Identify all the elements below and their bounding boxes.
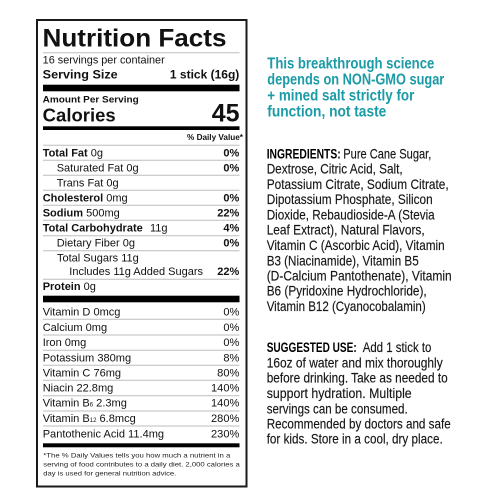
text block: ingredients: Dipotassium Phosphate, Silicon <box>267 191 433 207</box>
vitamin and mineral rows: 0% <box>223 307 239 319</box>
nutrient rows: 4% <box>223 223 240 235</box>
callout: teal heading <box>267 55 444 121</box>
nutrient rows: Sodium 500mg <box>43 208 120 220</box>
footnote: day is used for general nutrition advice. <box>43 470 176 477</box>
text block: suggested use: Recommended by doctors and safe <box>267 415 451 431</box>
daily value header: % Daily Value* <box>187 133 244 142</box>
nutrient rows: 22% <box>217 266 240 278</box>
footnote <box>43 452 240 477</box>
nutrient rows: Total Sugars 11g <box>57 253 139 265</box>
text block: ingredients: Vitamin B12 (Cyanocobalamin) <box>267 298 426 314</box>
vitamin and mineral rows: Vitamin C 76mg <box>43 368 121 380</box>
text block: ingredients: B6 (Pyridoxine Hydrochloride), <box>267 283 427 299</box>
text block: ingredients: Leaf Extract), Natural Flavors, <box>267 222 425 238</box>
vitamin and mineral rows: Niacin 22.8mg <box>43 383 113 395</box>
vitamin and mineral rows: Vitamin B6 2.3mg <box>43 398 127 410</box>
nutrient rows: 22% <box>217 208 240 220</box>
vitamin and mineral rows <box>43 307 240 440</box>
footnote: serving of food contributes to a daily diet. 2,000 calories a <box>43 462 240 469</box>
text block: suggested use: support hydration. Multiple <box>267 385 412 401</box>
callout: teal heading: + mined salt strictly for <box>267 87 414 104</box>
text block: suggested use: servings can be consumed. <box>267 400 408 416</box>
callout: teal heading: depends on NON-GMO sugar <box>267 71 444 88</box>
text block: ingredients: Potassium Citrate, Sodium Citrate, <box>267 176 449 192</box>
panel border <box>37 20 246 486</box>
footnote: *The % Daily Values tells you how much a nutrient in a <box>43 452 231 459</box>
nutrient rows: 11g <box>150 223 168 235</box>
text block: suggested use: 16oz of water and mix thoroughly <box>267 354 443 370</box>
text block: suggested use: SUGGESTED USE: <box>267 339 357 355</box>
text block: ingredients <box>267 145 452 314</box>
nutrient rows: Saturated Fat 0g <box>57 163 139 175</box>
servings per container: 16 servings per container <box>43 54 165 66</box>
text block: ingredients: Dioxide, Rebaudioside-A (Stevia <box>267 206 435 222</box>
nutrient rows: 0% <box>223 193 240 205</box>
text block: ingredients: B3 (Niacinamide), Vitamin B5 <box>267 252 419 268</box>
vitamin and mineral rows: 80% <box>217 368 239 380</box>
vitamin and mineral rows: 8% <box>223 352 239 364</box>
nutrient rows: 0% <box>223 148 240 160</box>
text block: suggested use: for kids. Store in a cool, dry place. <box>267 431 443 447</box>
nutrient rows: Cholesterol 0mg <box>43 193 128 205</box>
vitamin and mineral rows: Vitamin D 0mcg <box>43 307 120 319</box>
calories row: 45 <box>212 100 240 128</box>
text block: ingredients: Vitamin C (Ascorbic Acid), Vitamin <box>267 237 445 253</box>
nutrient rows: Total Fat 0g <box>43 148 103 160</box>
calories row <box>43 100 240 128</box>
nutrient rows: Protein 0g <box>43 281 96 293</box>
nutrient rows: Trans Fat 0g <box>57 178 119 190</box>
vitamin and mineral rows: Pantothenic Acid 11.4mg <box>43 428 164 440</box>
vitamin and mineral rows: 140% <box>211 398 239 410</box>
serving size row: Serving Size <box>43 67 118 81</box>
heading: Nutrition Facts: Nutrition Facts <box>42 25 226 53</box>
nutrient rows <box>43 148 240 293</box>
vitamin and mineral rows: Potassium 380mg <box>43 352 131 364</box>
vitamin and mineral rows: 230% <box>211 428 239 440</box>
amount per serving: Amount Per Serving <box>43 95 139 105</box>
text block: ingredients: INGREDIENTS: <box>267 145 341 161</box>
nutrient rows: 0% <box>223 238 240 250</box>
vitamin and mineral rows: Calcium 0mg <box>43 322 107 334</box>
vitamin and mineral rows: 140% <box>211 383 239 395</box>
vitamin and mineral rows: Vitamin B12 6.8mcg <box>43 413 136 425</box>
panel: nutrition facts label <box>37 20 246 486</box>
thick divider bar <box>43 85 240 91</box>
serving size row: 1 stick (16g) <box>170 67 239 81</box>
thick divider bar <box>43 296 240 302</box>
serving size row <box>43 67 239 81</box>
text block: suggested use: before drinking. Take as needed to <box>267 370 448 386</box>
vitamin and mineral rows: 0% <box>223 322 239 334</box>
calories row: Calories <box>43 106 116 126</box>
nutrient rows: Dietary Fiber 0g <box>57 238 135 250</box>
callout: teal heading: function, not taste <box>267 104 387 121</box>
vitamin and mineral rows: Iron 0mg <box>43 337 86 349</box>
nutrient rows: Total Carbohydrate <box>43 223 143 235</box>
text block: suggested use: Add 1 stick to <box>363 339 432 355</box>
text block: ingredients: (D-Calcium Pantothenate), Vitamin <box>267 268 452 284</box>
nutrient rows: Includes 11g Added Sugars <box>69 266 204 278</box>
text block: suggested use <box>267 339 451 447</box>
medium divider bar <box>43 443 240 447</box>
vitamin and mineral rows: 0% <box>223 337 239 349</box>
text block: ingredients: Pure Cane Sugar, <box>343 145 431 161</box>
text block: ingredients: Dextrose, Citric Acid, Salt, <box>267 161 403 177</box>
medium divider bar <box>43 126 240 130</box>
vitamin and mineral rows: 280% <box>211 413 239 425</box>
callout: teal heading: This breakthrough science <box>267 55 435 72</box>
nutrient rows: 0% <box>223 163 240 175</box>
